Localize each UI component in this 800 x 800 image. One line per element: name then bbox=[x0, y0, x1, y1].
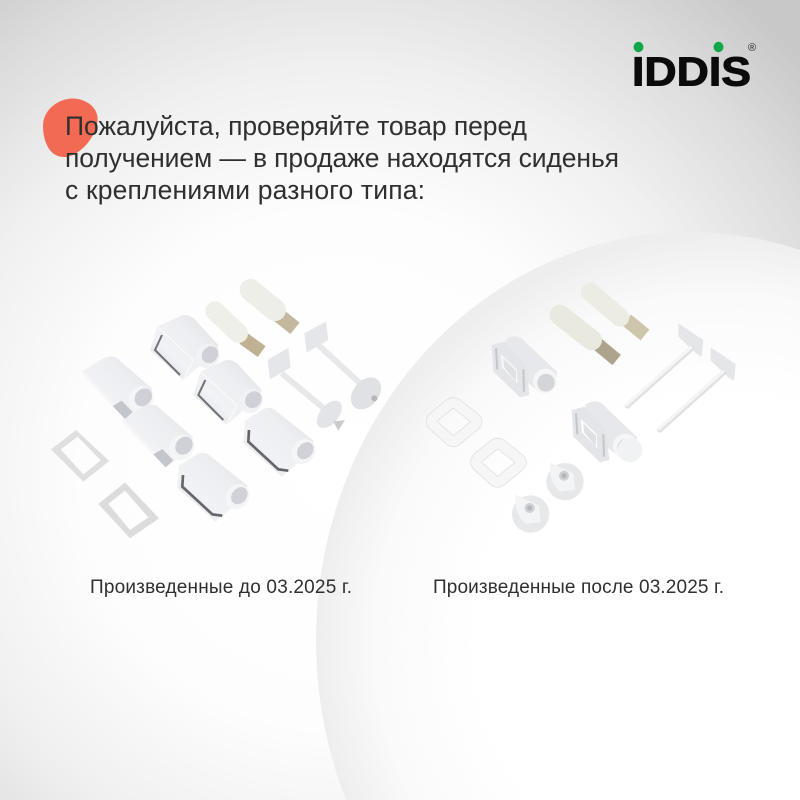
caption: before: Произведенные до 03.2025 г. bbox=[90, 577, 352, 598]
heading text bbox=[65, 111, 619, 205]
gasket frames bbox=[51, 430, 159, 538]
caption: after: Произведенные после 03.2025 г. bbox=[433, 577, 724, 598]
heading text: с креплениями разного типа: bbox=[65, 175, 425, 205]
pins bbox=[215, 290, 295, 352]
boxed clips bbox=[177, 408, 321, 522]
open clips bbox=[82, 357, 199, 467]
knobs bbox=[512, 462, 584, 533]
coral blob accent bbox=[43, 99, 98, 157]
screw with large disc bbox=[304, 322, 387, 415]
screw with small disc bbox=[268, 348, 347, 433]
product set: before 03.2025 bbox=[51, 290, 387, 538]
large white ellipse backdrop bbox=[316, 232, 800, 800]
logo: IDDIS: IDDIS bbox=[632, 48, 751, 94]
screws bbox=[627, 323, 736, 430]
round gaskets bbox=[432, 403, 521, 482]
heading text: получением — в продаже находятся сиденья bbox=[65, 143, 619, 173]
product set: after 03.2025 bbox=[432, 292, 736, 533]
logo: IDDIS: ® bbox=[748, 42, 756, 54]
clips bbox=[492, 336, 642, 463]
frame clips bbox=[150, 315, 268, 425]
pins bbox=[560, 292, 645, 360]
heading text: Пожалуйста, проверяйте товар перед bbox=[65, 111, 528, 141]
